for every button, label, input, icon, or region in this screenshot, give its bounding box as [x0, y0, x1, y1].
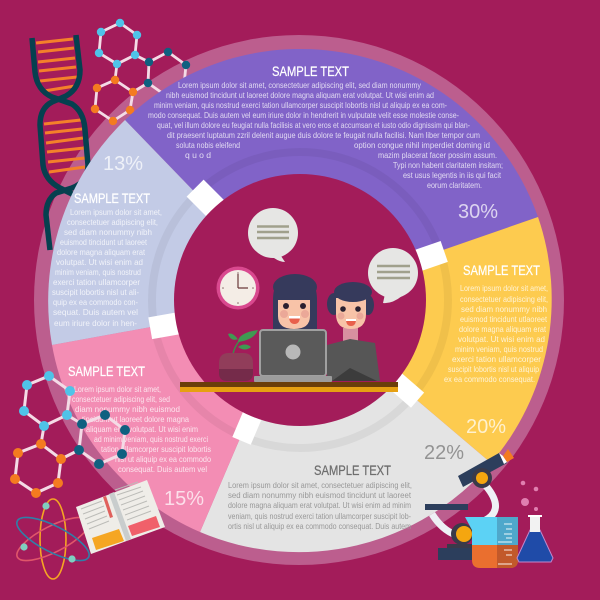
heading: pink: SAMPLE TEXT: [68, 364, 145, 379]
heading: light blue: SAMPLE TEXT: [74, 191, 150, 206]
body: purple: mazim placerat facer possim assum.: [378, 150, 497, 160]
heading: purple: SAMPLE TEXT: [272, 64, 349, 79]
figure: man: [327, 282, 380, 381]
segment dividers: [148, 180, 448, 445]
speech bubble right: [368, 248, 418, 303]
body: light blue: eum iriure dolor in hen-: [54, 318, 137, 328]
percent: 15%: 15%: [164, 488, 204, 510]
body: pink: nisl ut aliquip ex ea commodo: [115, 454, 211, 464]
body: light blue: [52, 207, 162, 328]
body: light blue: sequat. Duis autem vel: [53, 307, 138, 317]
body: light blue: consectetuer adipiscing elit,: [67, 217, 158, 227]
body: pink: aliquam erat volutpat. Ut wisi enim: [86, 424, 198, 434]
segment: gray 22%: [200, 300, 491, 552]
outer ring: [34, 35, 564, 565]
body: pink: diam nonummy nibh euismod: [75, 404, 180, 414]
icon: laptop: [254, 330, 332, 382]
body: purple: minim veniam, quis nostrud exerci tation ullamcorper suscipit lobortis nisl ut aliquip ex ea com-: [154, 100, 447, 110]
segment: purple 30%: [125, 49, 538, 300]
table: [180, 382, 398, 392]
body: gray: [228, 480, 412, 531]
body: pink: consectetuer adipiscing elit, sed: [72, 394, 170, 404]
body: light blue: suscipit lobortis nisl ut ali-: [52, 287, 139, 297]
body: pink: consequat. Duis autem vel: [118, 464, 207, 474]
body: purple: est usus legentis in iis qui facit: [403, 170, 502, 180]
icon: DNA helix: [32, 35, 88, 250]
icon: molecule bottom: [10, 371, 130, 498]
body: purple: option congue nihil imperdiet doming id: [354, 140, 490, 150]
body: yellow: euismod tincidunt utlaoreet: [460, 314, 548, 324]
heading: yellow: SAMPLE TEXT: [463, 263, 540, 278]
body: light blue: Lorem ipsum dolor sit amet,: [70, 207, 162, 217]
icon: microscope: [425, 449, 514, 560]
icon: clock: [216, 266, 260, 310]
figure: woman: [273, 274, 317, 330]
body: light blue: exerci tation ullamcorper: [53, 277, 140, 287]
body: light blue: quip ex ea commodo con-: [53, 297, 138, 307]
body: yellow: dolore magna aliquam erat: [459, 324, 547, 334]
body: pink: ad minim veniam, quis nostrud exerci: [94, 434, 208, 444]
icon: molecule top: [91, 19, 190, 125]
body: yellow: exerci tation ullamcorper: [452, 354, 541, 364]
body: light blue: euismod tincidunt ut laoreet: [60, 237, 147, 247]
body: purple: modo consequat. Duis autem vel eum iriure dolor in hendrerit in vulputate velit esse molestie conse-: [148, 110, 459, 120]
body: yellow: [444, 283, 548, 384]
text block: gray: [228, 463, 412, 531]
heading: gray: SAMPLE TEXT: [314, 463, 391, 478]
body: light blue: sed diam nonummy nibh: [64, 227, 152, 237]
percent: 13%: 13%: [103, 153, 143, 175]
body: pink: [72, 384, 211, 474]
body: yellow: suscipit lobortis nisl ut aliquip: [448, 364, 539, 374]
inner band: [152, 152, 448, 448]
text block: pink: [68, 364, 211, 474]
body: gray: ortis nisl ut aliquip ex ea commodo consequat. Duis autem: [228, 521, 411, 531]
body: light blue: volutpat. Ut wisi enim ad: [56, 257, 143, 267]
body: gray: dolore magna aliquam erat volutpat. Ut wisi enim ad minim: [228, 500, 411, 510]
speech bubble left: [248, 208, 298, 262]
segment: pink 15%: [52, 300, 299, 532]
body: yellow: sed diam nonummy nibh: [461, 304, 547, 314]
body: gray: sed diam nonummy nibh euismod tincidunt ut laoreet: [228, 490, 412, 500]
icon: atom: [11, 499, 95, 579]
body: yellow: Lorem ipsum dolor sit amet,: [460, 283, 548, 293]
body: purple: dit praesent luptatum zzril delenit augue duis dolore te feugait nulla facilisi. Nam liber tempor cum: [167, 130, 480, 140]
text block: purple: [148, 64, 503, 190]
body: light blue: dolore magna aliquam erat: [57, 247, 146, 257]
body: purple: quat, vel illum dolore eu feugiat nulla facilisis at vero eros et accumsan et iusto odio dignissim qui blan-: [157, 120, 470, 130]
icon: flask: [517, 481, 553, 562]
body: yellow: ex ea commodo consequat.: [444, 374, 535, 384]
body: pink: Lorem ipsum dolor sit amet,: [74, 384, 161, 394]
body: yellow: volutpat. Ut wisi enim ad: [458, 334, 545, 344]
body: purple: [148, 80, 503, 190]
body: purple: eorum claritatem.: [427, 180, 482, 190]
body: purple: nibh euismod tincidunt ut laoreet dolore magna aliquam erat volutpat. Ut wisi enim ad: [166, 90, 434, 100]
body: light blue: minim veniam, quis nostrud: [55, 267, 141, 277]
illustration: center scene: [180, 208, 418, 392]
text block: yellow: [444, 263, 548, 384]
body: pink: tincidunt ut laoreet dolore magna: [82, 414, 189, 424]
body: yellow: consectetuer adipiscing elit,: [460, 294, 548, 304]
icon: plant pot: [219, 330, 258, 381]
percent: 22%: 22%: [424, 442, 464, 464]
body: purple: Lorem ipsum dolor sit amet, consectetuer adipiscing elit, sed diam nonummy: [178, 80, 422, 90]
icon: beaker: [465, 517, 518, 568]
percent: 20%: 20%: [466, 416, 506, 438]
body: gray: veniam, quis nostrud exerci tation ullamcorper suscipit lob-: [228, 511, 411, 521]
center circle: [174, 174, 426, 426]
body: purple: soluta nobis eleifend: [176, 140, 240, 150]
segment: yellow 20%: [299, 217, 552, 463]
body: pink: tation ullamcorper suscipit lobortis: [101, 444, 211, 454]
body: purple: q u o d: [185, 150, 211, 160]
body: yellow: minim veniam, quis nostrud: [455, 344, 543, 354]
segment: light blue 13%: [48, 120, 299, 345]
percent: 30%: 30%: [458, 201, 498, 223]
icon: open book: [76, 480, 165, 554]
pie chart: [48, 49, 552, 552]
text block: light blue: [52, 191, 162, 328]
body: gray: Lorem ipsum dolor sit amet, consectetuer adipiscing elit,: [228, 480, 412, 490]
body: purple: Typi non habent claritatem insitam;: [393, 160, 503, 170]
